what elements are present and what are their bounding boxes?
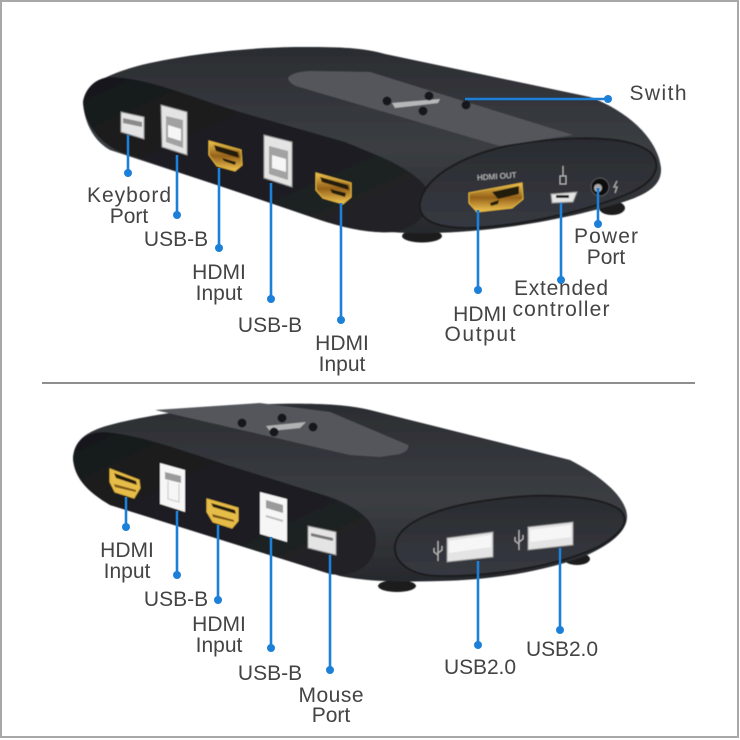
usb-b port 2 [264,135,292,187]
top switch panel [288,71,573,146]
callout: hdmi input 1 [192,168,246,305]
callout: hdmi input 1: HDMI [192,261,246,284]
top device: front view [83,47,661,242]
callout: extended controller [512,203,610,321]
divider [42,382,695,384]
usb 2.0 port 1 [447,532,493,562]
usb-b port 2 [260,492,287,542]
panel print [266,422,306,431]
callout: usb-b 2: USB-B [238,314,302,337]
switch buttons [382,92,470,116]
usb icon 2 [515,530,523,550]
body [83,47,661,233]
callout: usb 2.0 right: USB2.0 [526,638,598,661]
callout: hdmi input 1: Input [196,282,243,305]
usb-b port 1 [160,463,185,512]
callout: extended controller: Extended [514,277,608,300]
switch buttons [238,414,318,436]
hdmi output port [469,183,523,212]
extended controller port [551,166,577,203]
callout: usb-b 2 [238,183,302,337]
callout: power port: Power [574,225,638,248]
body [73,404,627,581]
foot right [564,553,590,565]
foot right [599,201,625,215]
keyboard port [121,112,144,139]
foot [402,230,442,242]
hdmi out label: HDMI OUT [477,171,517,182]
mouse port [308,526,336,555]
right oval face [395,496,625,576]
callout: mouse port: Mouse [298,684,364,707]
callout: usb 2.0 left [444,561,516,679]
callout: bottom hdmi input 2 [192,525,246,657]
callout: bottom hdmi input 2: Input [196,634,243,657]
callout: bottom usb-b 1 [144,511,208,611]
callout: hdmi output: Output [444,323,516,346]
usb-b port 1 [161,105,187,155]
front face left [83,77,429,232]
top switch panel [155,403,408,457]
callout: bottom usb-b 2: USB-B [238,662,302,685]
hdmi port 1 [209,141,242,171]
callout: extended controller: controller [512,298,610,321]
callout: keyboard port: Keybord [87,184,171,207]
callout: bottom usb-b 2 [238,537,302,685]
callout: hdmi output [444,210,516,346]
callout: hdmi output: HDMI [453,303,507,326]
callout: mouse port: Port [312,704,350,727]
callout: bottom hdmi input 1 [100,497,154,583]
hdmi port 2 [207,499,238,528]
callout: switch: Swith [630,82,686,105]
callout: usb 2.0 right [526,548,598,661]
callout: bottom usb-b 1: USB-B [144,588,208,611]
callout: power port: Port [587,246,625,269]
callout: bottom hdmi input 2: HDMI [192,613,246,636]
callout: usb-b 1: USB-B [144,228,208,251]
callout: bottom hdmi input 1: Input [104,560,151,583]
power jack [591,178,617,196]
callout: hdmi input 2: Input [319,353,366,376]
callout: usb 2.0 left: USB2.0 [444,656,516,679]
callout: hdmi input 2 [315,203,369,376]
callout: mouse port [298,555,364,727]
right oval face [420,138,656,228]
callout: keyboard port: Port [110,205,148,228]
bottom device: rear view [73,403,627,592]
callout: usb-b 1 [144,155,208,251]
hdmi port 2 [316,173,351,204]
foot [378,580,416,592]
callout: bottom hdmi input 1: HDMI [100,539,154,562]
callout: power port [574,188,638,269]
usb icon 1 [434,541,442,561]
callout: keyboard port [87,135,171,228]
callout: hdmi input 2: HDMI [315,332,369,355]
hdmi port 1 [110,469,140,498]
callout: switch [465,82,686,105]
usb 2.0 port 2 [528,522,573,550]
panel print [392,99,440,108]
front face left [73,432,376,575]
